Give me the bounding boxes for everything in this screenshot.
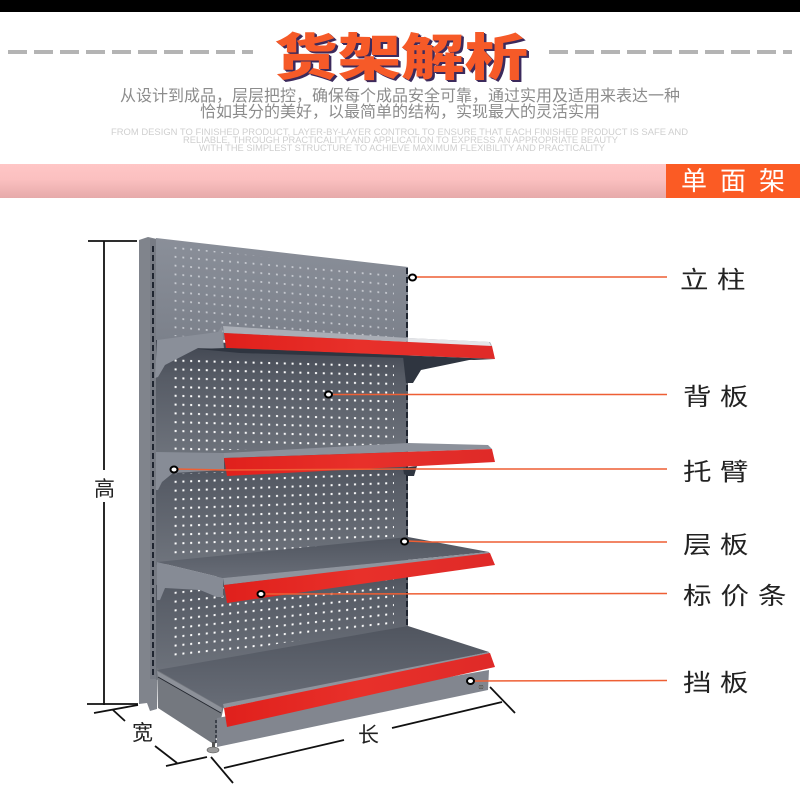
callout: shelf board: 层板 [683, 531, 757, 558]
dimension label: width: 宽 [132, 722, 153, 745]
section tag: 单面架 [681, 166, 798, 196]
width dimension [94, 705, 207, 766]
length dimension [211, 687, 515, 783]
callout: price strip [258, 582, 795, 609]
Chinese intro text [120, 87, 680, 121]
Chinese intro text: 恰如其分的美好，以最简单的结构，实现最大的灵活实用 [200, 104, 600, 121]
shelf 1 [155, 326, 495, 383]
right dashed rule [549, 50, 792, 54]
callout: bracket: 托臂 [683, 458, 757, 485]
dimension label: length: 长 [358, 724, 379, 747]
English intro text: WITH THE SIMPLEST STRUCTURE TO ACHIEVE MAXIMUM FLEXIBILITY AND PRACTICALITY [199, 143, 605, 153]
callout: baffle [467, 669, 757, 696]
left dashed rule [8, 50, 253, 54]
callout: back panel: 背板 [683, 383, 757, 410]
callout: baffle: 挡板 [683, 669, 757, 696]
callout: upright: 立柱 [680, 266, 754, 293]
callout: price strip: 标价条 [683, 582, 795, 609]
base shelf [157, 626, 495, 747]
English intro text: RELIABLE, THROUGH PRACTICALITY AND APPLICATION TO EXPRESS AN APPROPRIATE BEAUTY [183, 135, 618, 145]
shelf 3 [157, 537, 495, 603]
callout: shelf board [401, 531, 757, 558]
English intro text [111, 127, 689, 153]
top black bar [0, 0, 800, 12]
side upright post [139, 237, 157, 711]
Chinese intro text: 从设计到成品，层层把控，确保每个成品安全可靠，通过实用及适用来表达一种 [120, 88, 680, 105]
levelling feet [207, 685, 484, 753]
shelf unit illustration [139, 237, 495, 753]
pink section band [0, 164, 800, 198]
height dimension [87, 241, 138, 705]
callout: bracket [170, 458, 757, 485]
English intro text: FROM DESIGN TO FINISHED PRODUCT, LAYER-BY-LAYER CONTROL TO ENSURE THAT EACH FINISHED PRODUCT IS SAFE AND [111, 127, 689, 137]
slots on uprights [153, 246, 407, 678]
dimension label: height: 高 [94, 478, 115, 501]
shelf 2 [156, 443, 495, 490]
callout: upright [409, 266, 754, 293]
back panel [156, 238, 408, 680]
dimension lines [87, 241, 515, 783]
callout: back panel [325, 383, 757, 410]
title: 货架解析 [274, 18, 528, 90]
